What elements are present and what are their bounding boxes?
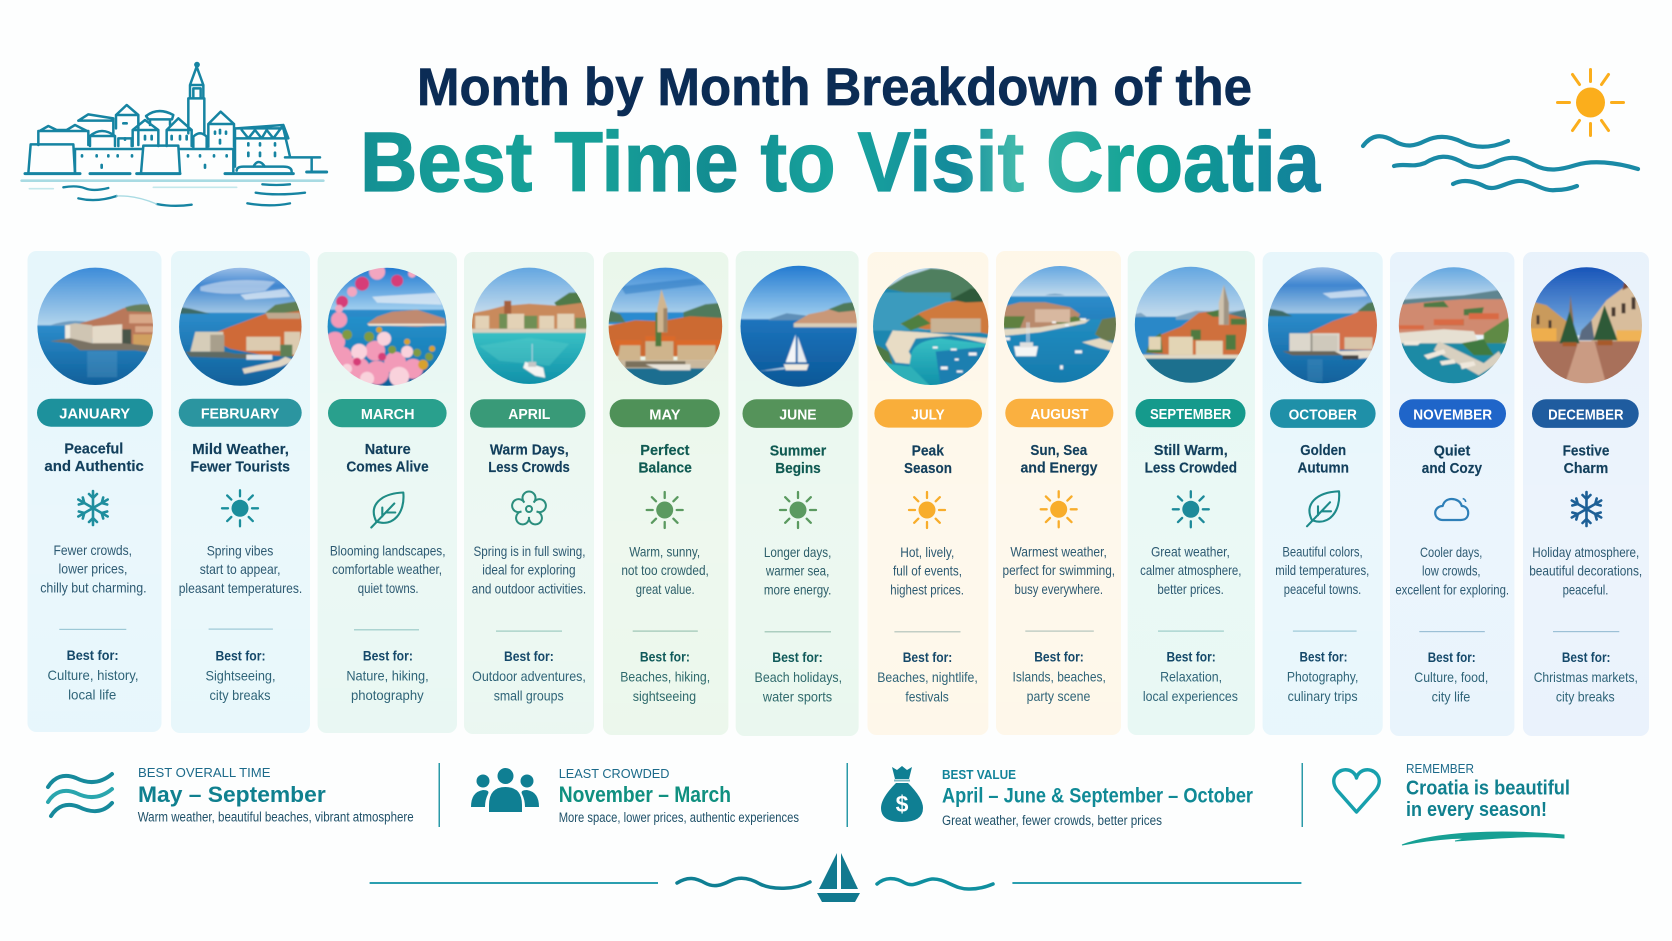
description: pleasant temperatures. (179, 580, 302, 596)
heading: Less Crowds (488, 460, 570, 476)
photo: old town harbour (178, 267, 302, 389)
month pill: OCTOBER (1289, 408, 1357, 424)
month pill: JUNE (779, 408, 817, 424)
heading: Quiet (1434, 444, 1470, 460)
summary: best overall time (48, 765, 414, 824)
summary: least crowded: LEAST CROWDED (559, 766, 670, 781)
photo: beach and lagoon (871, 266, 991, 386)
icon: sea waves (1363, 136, 1638, 190)
panel: August (996, 251, 1121, 735)
panel: December (1523, 252, 1649, 736)
month pill: DECEMBER (1548, 408, 1624, 424)
best for: Islands, beaches, (1013, 669, 1106, 685)
description: Warmest weather, (1010, 544, 1107, 560)
heading (1422, 444, 1482, 477)
underline brush stroke (1402, 832, 1564, 845)
best for: culinary trips (1288, 688, 1358, 704)
icon: money bag: $ (896, 791, 909, 817)
month pill: JANUARY (59, 406, 130, 422)
heading (1563, 444, 1609, 477)
footer ornament (370, 853, 1301, 902)
description: start to appear, (200, 561, 280, 577)
description: mild temperatures, (1275, 562, 1369, 578)
photo: harbour with yacht (1004, 266, 1116, 383)
month pill: AUGUST (1030, 407, 1089, 423)
best for: Best for: (67, 647, 119, 663)
heading: Nature (365, 442, 411, 458)
heading (346, 442, 429, 476)
description: beautiful decorations, (1529, 562, 1642, 578)
best for: Best for: (903, 649, 952, 665)
photo: Christmas square at dusk (1531, 267, 1642, 384)
photo: church on the coast (1131, 265, 1251, 385)
best for (1287, 648, 1358, 704)
month pill: SEPTEMBER (1150, 407, 1232, 423)
icon: flower (512, 492, 546, 524)
heading: Summer (770, 444, 827, 460)
description: chilly but charming. (40, 580, 147, 596)
best for: Sightseeing, (206, 667, 276, 683)
description (1529, 544, 1642, 598)
best for (1534, 649, 1638, 704)
best for: Photography, (1287, 668, 1358, 684)
summary: best value: Great weather, fewer crowds, better prices (942, 813, 1162, 828)
title (360, 58, 1321, 209)
best for: Beaches, hiking, (620, 668, 710, 684)
best for (1414, 649, 1488, 704)
description (40, 542, 147, 596)
photo: blossoms and island (325, 264, 449, 388)
best for: photography (351, 687, 424, 703)
best for (206, 647, 276, 703)
month pill (179, 399, 302, 427)
month pill: FEBRUARY (201, 406, 280, 422)
heading (1298, 443, 1349, 476)
heading (191, 442, 290, 475)
icon: sailboat (817, 853, 860, 902)
summary: best value (881, 766, 1253, 828)
best for: party scene (1027, 688, 1091, 704)
description (330, 543, 446, 596)
description: Fewer crowds, (54, 542, 132, 558)
best for: Culture, food, (1414, 669, 1488, 685)
panel: October (1262, 252, 1383, 735)
best for (877, 649, 978, 704)
heading (488, 443, 570, 476)
best for (1013, 649, 1106, 704)
summary: best overall time: May – September (138, 782, 326, 807)
heading: Fewer Tourists (191, 459, 290, 475)
icon: sun (780, 492, 816, 528)
description (1140, 544, 1242, 597)
heading: and Energy (1020, 461, 1098, 477)
description (1002, 544, 1115, 597)
best for: Nature, hiking, (346, 668, 429, 684)
best for: local life (68, 686, 116, 702)
icon: sun (909, 492, 945, 528)
best for: city breaks (1556, 688, 1615, 704)
heading: Golden (1300, 443, 1346, 459)
heading: Autumn (1298, 460, 1349, 476)
panel: November (1390, 252, 1514, 736)
description: Cooler days, (1420, 544, 1482, 560)
summary: remember: in every season! (1406, 799, 1547, 821)
best for: city breaks (210, 687, 270, 703)
month pill: APRIL (508, 407, 550, 423)
summary: least crowded: November – March (559, 782, 731, 807)
heading: Peaceful (64, 442, 123, 458)
description (1395, 544, 1509, 598)
photo: sailboat at sea (737, 264, 861, 389)
best for: local experiences (1143, 688, 1238, 704)
description: Beautiful colors, (1282, 544, 1363, 560)
panel: January (28, 251, 162, 732)
best for (346, 648, 429, 703)
heading (638, 443, 692, 476)
panel: June (736, 251, 861, 736)
best for: Outdoor adventures, (472, 668, 586, 684)
icon: sun (1558, 70, 1624, 136)
best for (1143, 648, 1238, 704)
description: Holiday atmosphere, (1532, 544, 1639, 560)
icon: people (471, 768, 539, 812)
best for: Best for: (1562, 649, 1610, 665)
heading: Perfect (640, 443, 690, 459)
best for: Best for: (216, 647, 266, 663)
best for (48, 647, 138, 702)
heading (770, 444, 827, 477)
month pill (1532, 399, 1639, 428)
photo: fortress by the sea (35, 266, 155, 387)
heading: Festive (1563, 444, 1609, 460)
icon: money bag (881, 766, 923, 822)
month pill (742, 399, 853, 428)
best for: Relaxation, (1160, 668, 1222, 684)
summary: best overall time: BEST OVERALL TIME (138, 765, 271, 780)
description: and outdoor activities. (472, 581, 586, 597)
best for (472, 648, 586, 704)
month pill (328, 399, 447, 427)
photo: hillside town and marina (1398, 267, 1509, 384)
best for: Best for: (1034, 649, 1084, 665)
title line one: Month by Month Breakdown of the (417, 58, 1252, 117)
description: Great weather, (1151, 544, 1230, 560)
description: perfect for swimming, (1002, 562, 1115, 578)
heading (1145, 443, 1237, 476)
description: quiet towns. (358, 580, 419, 596)
month pill (1270, 399, 1376, 428)
heading (44, 442, 144, 475)
heading: and Authentic (44, 459, 144, 475)
heading: Still Warm, (1154, 443, 1228, 459)
description: peaceful. (1563, 582, 1608, 598)
panel: April (464, 252, 594, 734)
description: low crowds, (1422, 562, 1481, 578)
best for: Best for: (1428, 649, 1476, 665)
heading: Charm (1564, 461, 1608, 477)
description: busy everywhere. (1015, 581, 1103, 597)
description: Longer days, (764, 544, 831, 560)
month pill: JULY (911, 408, 945, 424)
best for (755, 649, 842, 704)
icon: old town skyline (22, 63, 327, 206)
summary: remember: REMEMBER (1406, 761, 1474, 776)
best for: sightseeing (633, 688, 696, 704)
best for: Best for: (772, 649, 823, 665)
panel: July (868, 252, 991, 735)
month pill: MARCH (361, 407, 415, 423)
icon: sun (222, 490, 258, 526)
heading: Peak (912, 444, 945, 460)
month pill: MAY (649, 407, 681, 423)
icon: leaf (1307, 491, 1339, 526)
summary: best value: BEST VALUE (942, 767, 1016, 782)
heading: Comes Alive (346, 460, 429, 476)
panel: May (603, 252, 728, 735)
summary: remember: Croatia is beautiful (1406, 778, 1570, 800)
panel: March (318, 252, 457, 733)
heading (1020, 443, 1098, 477)
month pill (610, 399, 720, 427)
summary: least crowded (471, 766, 799, 825)
description: Spring is in full swing, (474, 543, 586, 559)
icon: snowflake (78, 491, 108, 525)
heading: Warm Days, (490, 443, 569, 459)
description: Warm, sunny, (629, 544, 700, 560)
description (1275, 544, 1369, 597)
best for: festivals (905, 688, 949, 704)
best for: Best for: (1166, 648, 1216, 664)
description: Spring vibes (207, 542, 273, 558)
best for (620, 648, 710, 704)
month pill (874, 399, 982, 428)
description (472, 543, 586, 597)
icon: sun (1173, 491, 1209, 527)
icon: leaf (371, 492, 404, 528)
description (764, 544, 831, 598)
best for: Beach holidays, (755, 669, 842, 685)
summary: best overall time: Warm weather, beautiful beaches, vibrant atmosphere (138, 810, 414, 824)
photo: autumn old town (1268, 267, 1377, 384)
description: ideal for exploring (482, 562, 576, 578)
description: excellent for exploring. (1395, 582, 1509, 598)
heading: and Cozy (1422, 461, 1482, 477)
description: Blooming landscapes, (330, 543, 446, 559)
best for: Best for: (363, 648, 413, 664)
month pill (1136, 399, 1246, 427)
description: peaceful towns. (1284, 581, 1361, 597)
heading: Balance (638, 460, 692, 476)
summary: least crowded: More space, lower prices, authentic experiences (559, 810, 799, 825)
description: calmer atmosphere, (1140, 562, 1242, 578)
description (890, 544, 964, 598)
month pill (470, 399, 586, 428)
panel: February (171, 251, 310, 733)
description: Hot, lively, (900, 544, 954, 560)
description (179, 542, 302, 596)
best for: Culture, history, (48, 667, 138, 683)
heading: Mild Weather, (192, 442, 289, 458)
best for: Best for: (504, 648, 554, 664)
best for: water sports (762, 688, 832, 704)
best for: Best for: (1300, 648, 1347, 664)
description: highest prices. (890, 582, 964, 598)
icon: heart (1334, 770, 1379, 812)
heading: Less Crowded (1145, 460, 1237, 476)
description: more energy. (764, 582, 831, 598)
heading (904, 444, 952, 477)
month pill (1005, 399, 1113, 427)
description: great value. (636, 581, 695, 597)
description: comfortable weather, (332, 561, 442, 577)
heading: Begins (775, 461, 821, 477)
month pill: NOVEMBER (1413, 408, 1493, 424)
heading: Sun, Sea (1030, 443, 1088, 459)
summary: remember (1334, 761, 1570, 845)
description: better prices. (1157, 581, 1224, 597)
icon: cloud (1435, 498, 1468, 520)
summary: best value: April – June & September – October (942, 784, 1253, 808)
description: full of events, (893, 562, 962, 578)
panel: September (1128, 251, 1255, 735)
best for: Christmas markets, (1534, 669, 1638, 685)
month pill (1399, 399, 1506, 428)
icon: waves (48, 774, 112, 816)
description: lower prices, (59, 560, 127, 576)
description: warmer sea, (765, 562, 829, 578)
description (621, 544, 709, 597)
best for: Beaches, nightlife, (877, 669, 978, 685)
icon: sun (1041, 491, 1077, 527)
best for: Best for: (640, 648, 690, 664)
heading: Season (904, 461, 952, 477)
icon: snowflake (1572, 492, 1601, 526)
title line two: Best Time to Visit Croatia (360, 115, 1321, 209)
icon: sun (647, 492, 683, 528)
photo: turquoise bay (469, 266, 589, 385)
description: not too crowded, (621, 562, 709, 578)
best for: city life (1432, 688, 1471, 704)
month pill (37, 399, 153, 427)
best for: small groups (494, 688, 564, 704)
photo: bell tower town (605, 266, 725, 388)
